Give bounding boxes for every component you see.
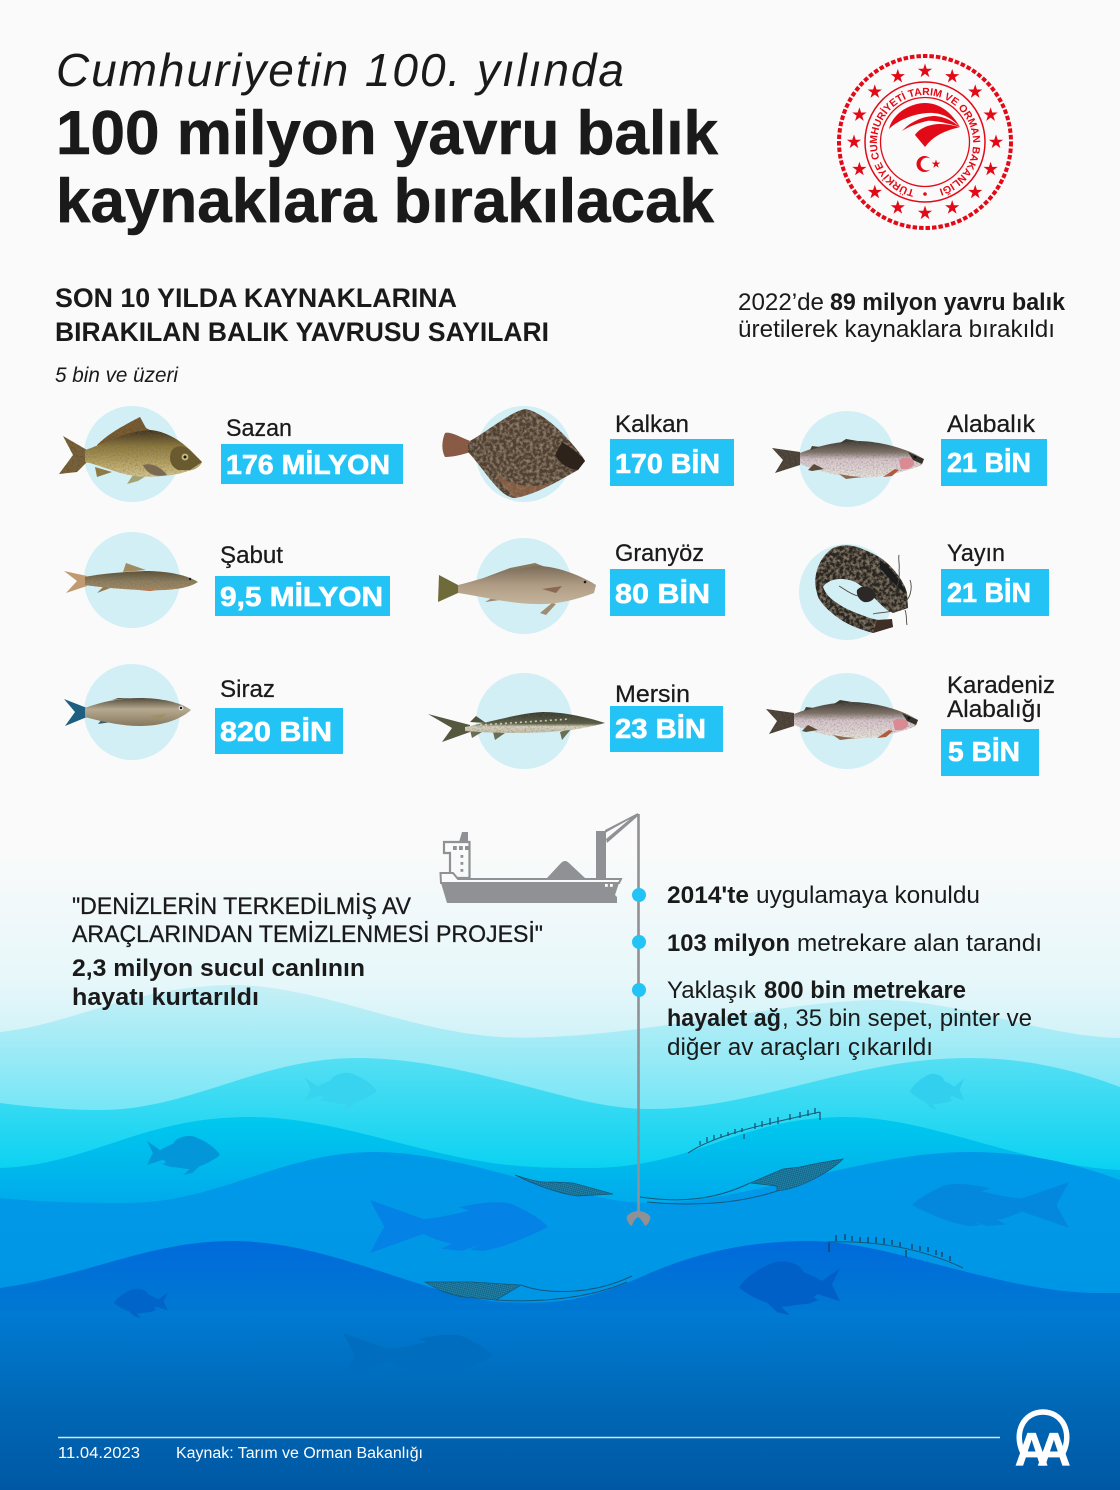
label: Karadeniz Alabalığı: Alabalığı [947,696,1042,723]
label: Kalkan [610,411,734,486]
label: Mersin [610,681,723,752]
text block: project facts: 103 milyon [667,930,790,957]
label: Kalkan: 170 BİN [615,448,720,479]
fish item: Sazan [59,406,202,502]
text block: project name and result: "DENİZLERİN TERKEDİLMİŞ AV [72,893,411,920]
label: Şabut [215,542,390,616]
label: Alabalık [941,411,1047,486]
fish item: Mersin [428,673,605,769]
text block: project facts: , 35 bin sepet, pinter ve [782,1005,1032,1032]
footer: date and source: Kaynak: Tarım ve Orman Bakanlığı [176,1445,423,1462]
text block: project facts: Yaklaşık [667,977,757,1004]
label: Granyöz: 80 BİN [615,578,710,609]
logo: AA [1015,1412,1069,1475]
label: Karadeniz Alabalığı: 5 BİN [948,736,1020,767]
footer: date and source: 11.04.2023 [58,1445,140,1462]
label: Siraz: Siraz [220,676,275,703]
callout: 2022 production: 89 milyon yavru balık [830,289,1066,316]
label: Sazan: 176 MİLYON [226,449,390,480]
text block: project facts: metrekare alan tarandı [797,930,1042,957]
logo: ministry seal: TÜRKİYE CUMHURİYETİ TARIM VE ORMAN BAKANLIĞI [870,88,980,197]
label: Siraz [215,676,343,754]
fish item: Kalkan [442,406,585,502]
callout: 2022 production [738,289,1066,343]
text block: project name and result: hayatı kurtarıldı [72,984,259,1011]
label: Mersin: 23 BİN [615,713,706,744]
icon: ship with crane [440,813,638,903]
label: Siraz: 820 BİN [220,716,332,747]
label: Granyöz [610,540,725,616]
sea: layered waves [0,985,1120,1490]
label: Karadeniz Alabalığı [941,672,1055,776]
title: Cumhuriyetin 100. yılında [56,44,624,96]
title [56,44,719,236]
label: Granyöz: Granyöz [615,540,704,567]
subheading: threshold note: 5 bin ve üzeri [55,364,179,387]
footer: date and source [58,1438,1000,1462]
text block: project facts: 800 bin metrekare [764,977,966,1004]
text block: project name and result [72,893,543,1011]
fish item: Yayın [799,544,911,640]
label: Yayın [941,540,1049,616]
label: Şabut: 9,5 MİLYON [220,581,383,612]
label: Mersin: Mersin [615,681,690,708]
sea: fish silhouettes [114,1073,1069,1378]
fish item: Şabut [64,532,198,628]
fish item: Karadeniz Alabalığı [766,673,918,769]
text block: project facts [667,882,1042,1061]
section heading [55,283,549,347]
title: 100 milyon yavru balık [56,99,719,168]
section heading: SON 10 YILDA KAYNAKLARINA [55,283,457,313]
label: Karadeniz Alabalığı: Karadeniz [947,672,1055,699]
label: Sazan [221,415,403,484]
text block: project name and result: 2,3 milyon sucul canlının [72,955,365,982]
ghost nets and longlines [425,1108,963,1301]
label: Yayın: Yayın [947,540,1005,567]
section heading: BIRAKILAN BALIK YAVRUSU SAYILARI [55,317,549,347]
text block: project facts: uygulamaya konuldu [756,882,980,909]
callout: 2022 production: 2022’de [738,289,824,316]
timeline cable with hook and dots [626,814,650,1226]
title: kaynaklara bırakılacak [56,167,715,236]
fish item: Granyöz [438,538,596,634]
fish item: Siraz [64,664,191,760]
label: Kalkan: Kalkan [615,411,689,438]
callout: 2022 production: üretilerek kaynaklara bırakıldı [738,316,1055,343]
fish item: Alabalık [772,411,924,507]
logo: AA: AA [1015,1423,1069,1475]
text block: project name and result: ARAÇLARINDAN TEMİZLENMESİ PROJESİ" [72,921,543,948]
label: Sazan: Sazan [226,415,292,442]
label: Şabut: Şabut [220,542,283,569]
logo: ministry seal [837,54,1013,230]
text block: project facts: hayalet ağ [667,1005,781,1032]
label: Alabalık: 21 BİN [947,447,1031,478]
text block: project facts: 2014'te [667,882,749,909]
label: Yayın: 21 BİN [947,577,1031,608]
text block: project facts: diğer av araçları çıkarıldı [667,1034,933,1061]
label: Alabalık: Alabalık [947,411,1036,438]
